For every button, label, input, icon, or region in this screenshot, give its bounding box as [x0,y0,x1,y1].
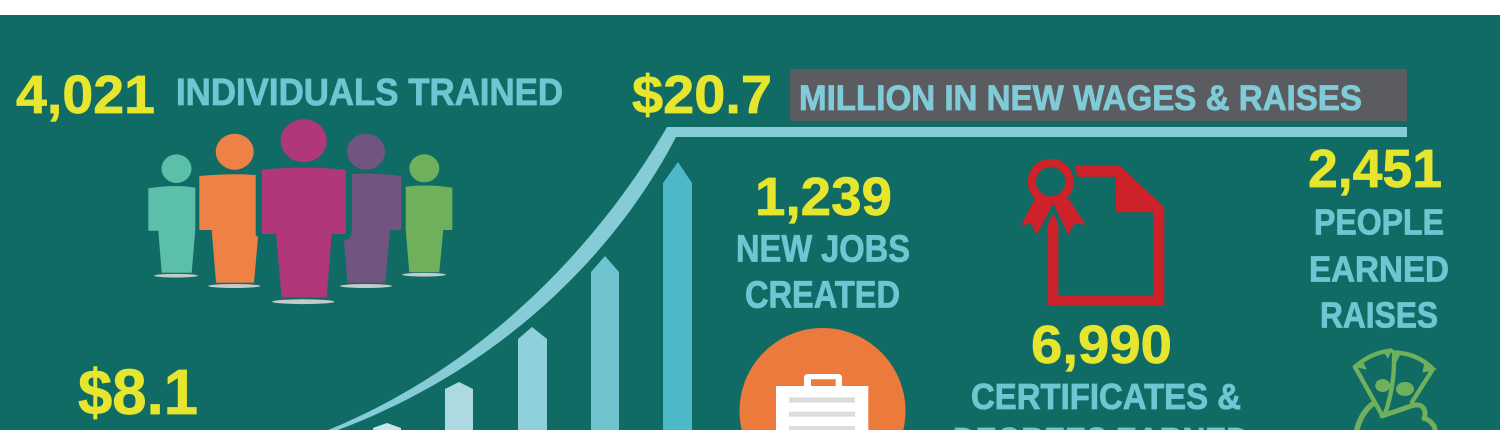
arrow bar 4 [591,256,619,430]
label: earned: EARNED [1309,248,1449,290]
label bar: million in new wages and raises: MILLION IN NEW WAGES & RAISES [799,79,1362,118]
label: individuals trained: INDIVIDUALS TRAINED [176,72,563,114]
number: 6,990: 6,990 [1031,315,1172,375]
stat: $20.7 million in new wages and raises [632,65,1407,125]
label: created: CREATED [745,274,900,316]
number: 2,451: 2,451 [1308,139,1442,199]
stat: people earned raises [1308,139,1449,336]
label: new jobs: NEW JOBS [736,228,910,270]
growth curve line [328,127,1407,430]
arrow bar 3 [518,327,547,430]
label: people: PEOPLE [1314,202,1444,242]
label: raises: RAISES [1320,294,1438,336]
icon: money bag with bills [1353,350,1436,430]
person: magenta [262,119,346,304]
stat: $8.1: $8.1 [78,356,198,428]
number: 4,021: 4,021 [16,65,155,125]
stat: certificates and degrees earned [953,315,1249,430]
number: 1,239: 1,239 [755,167,892,227]
arrow bar 2 [445,382,473,430]
stat: new jobs created [736,167,910,316]
person: purple [340,134,401,288]
stat: individuals trained [16,65,563,125]
icon: briefcase in orange circle [740,328,906,430]
icon: group of five people [148,119,452,304]
person: orange [199,134,260,288]
arrow bar 5 [663,162,692,430]
person: teal [148,154,198,278]
label: certificates: CERTIFICATES & [971,376,1241,417]
bar chart: rising arrows [373,162,692,430]
icon: certificate document with ribbon [1021,159,1164,306]
person: green [402,154,452,277]
number: $20.7: $20.7 [632,65,772,125]
arrow bar 1 [373,423,401,430]
